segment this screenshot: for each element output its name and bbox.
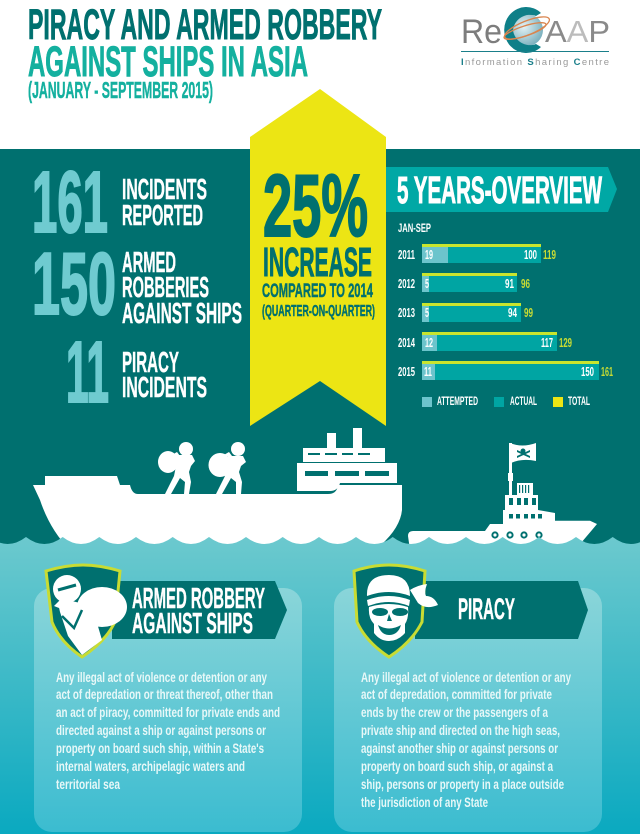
bar 2011: 19 [425,247,433,262]
text block: armed robbery definition: an act of piracy, committed for private ends and [56,704,280,720]
title [28,1,382,103]
text block: armed robbery definition: property on board such ship, within a State's [56,740,264,756]
bar 2013: 99 [524,305,533,320]
bar 2015: 150 [581,364,594,379]
bar 2011: 2011 [398,247,415,262]
legend: ACTUAL [510,394,537,408]
icon: cargo ship [33,428,402,550]
bar chart: five year overview: JAN-SEP [398,221,431,235]
sea waves [0,537,640,834]
text block: piracy definition: against another ship or against persons or [361,740,558,756]
stat: 161 incidents reported: INCIDENTS [122,174,207,206]
bar 2013: 94 [508,305,517,320]
bar 2014: 117 [541,335,553,350]
yellow arrow callout: 25% increase: 25% [263,156,368,255]
icon: robber one [158,442,195,494]
stat: 150 armed robberies against ships [32,234,242,333]
text block: armed robbery definition: directed against a ship or against persons or [56,722,266,738]
legend [422,394,590,408]
logo: ReCAAP: Information Sharing Centre [461,57,609,68]
bar 2013 [398,303,533,322]
bar 2013: 5 [425,305,429,320]
text block: piracy definition: private ship and directed on the high seas, [361,722,560,738]
text block: piracy definition: ends by the crew or the passengers of a [361,704,548,720]
bar 2012: 96 [521,276,530,291]
heading banner: armed robbery: AGAINST SHIPS [132,608,253,640]
icon: skull shield [354,565,438,657]
bar 2014: 2014 [398,335,415,350]
logo: ReCAAP: AAP [545,14,610,49]
legend: ATTEMPTED [437,394,478,408]
text block: armed robbery definition: Any illegal act of violence or detention or any [56,669,267,685]
legend: TOTAL [568,394,590,408]
stat: 161 incidents reported: 161 [32,154,108,251]
bar 2011: 100 [524,247,537,262]
bar 2012: 5 [425,276,429,291]
yellow arrow callout: 25% increase: (QUARTER-ON-QUARTER) [262,303,375,320]
stat: 150 armed robberies against ships: ARMED [122,247,176,279]
bar 2011: 119 [543,247,556,262]
title: AGAINST SHIPS IN ASIA [28,38,308,86]
stat: 150 armed robberies against ships: AGAINST SHIPS [122,298,242,330]
text block: armed robbery definition: internal waters, archipelagic waters and [56,758,245,774]
bar 2012 [398,273,530,292]
text block: piracy definition: property on board such ship, or against a [361,758,553,774]
logo: ReCAAP: Re [461,13,502,51]
yellow arrow callout: 25% increase [250,89,386,426]
bar 2015 [398,361,613,380]
bar 2014: 129 [559,335,572,350]
heading banner: piracy: PIRACY [458,593,515,626]
stat: 11 piracy incidents: PIRACY [122,347,179,379]
heading banner: piracy [415,581,588,639]
bar 2015: 2015 [398,364,415,379]
yellow arrow callout: 25% increase: COMPARED TO 2014 [262,281,373,302]
stat: 161 incidents reported: REPORTED [122,200,203,232]
text block: piracy definition: the jurisdiction of any State [361,794,488,810]
bar 2012: 91 [505,276,514,291]
panel: piracy [334,565,602,832]
icon: robber shield [46,565,127,657]
icon: robber two [208,442,246,494]
heading banner: armed robbery: ARMED ROBBERY [132,583,265,615]
yellow arrow callout: 25% increase: INCREASE [263,239,372,285]
stat: 11 piracy incidents: 11 [66,324,109,421]
text block: armed robbery definition: act of depredation or threat thereof, other than [56,686,273,702]
text block: armed robbery definition [56,669,280,792]
panel: armed robbery against ships [34,565,302,832]
text block: piracy definition [361,669,571,810]
title: (JANUARY - SEPTEMBER 2015) [28,77,213,103]
logo: ReCAAP [461,7,610,68]
heading banner: armed robbery [112,581,287,640]
bar 2014 [398,332,572,351]
stat: 150 armed robberies against ships: ROBBERIES [122,272,209,304]
bar 2012: 2012 [398,276,415,291]
bar 2013: 2013 [398,305,415,320]
text block: armed robbery definition: territorial sea [56,776,120,792]
text block: piracy definition: act of depredation, committed for private [361,686,552,702]
stat: 11 piracy incidents [66,324,207,421]
stat: 150 armed robberies against ships: 150 [32,234,116,333]
stat: 11 piracy incidents: INCIDENTS [122,372,207,404]
icon: pirate tugboat [408,443,597,550]
bar 2015: 11 [424,364,432,379]
bar chart: five year overview [398,221,613,408]
bar 2011 [398,244,556,263]
bar 2014: 12 [425,335,433,350]
bar 2015: 161 [601,364,613,379]
